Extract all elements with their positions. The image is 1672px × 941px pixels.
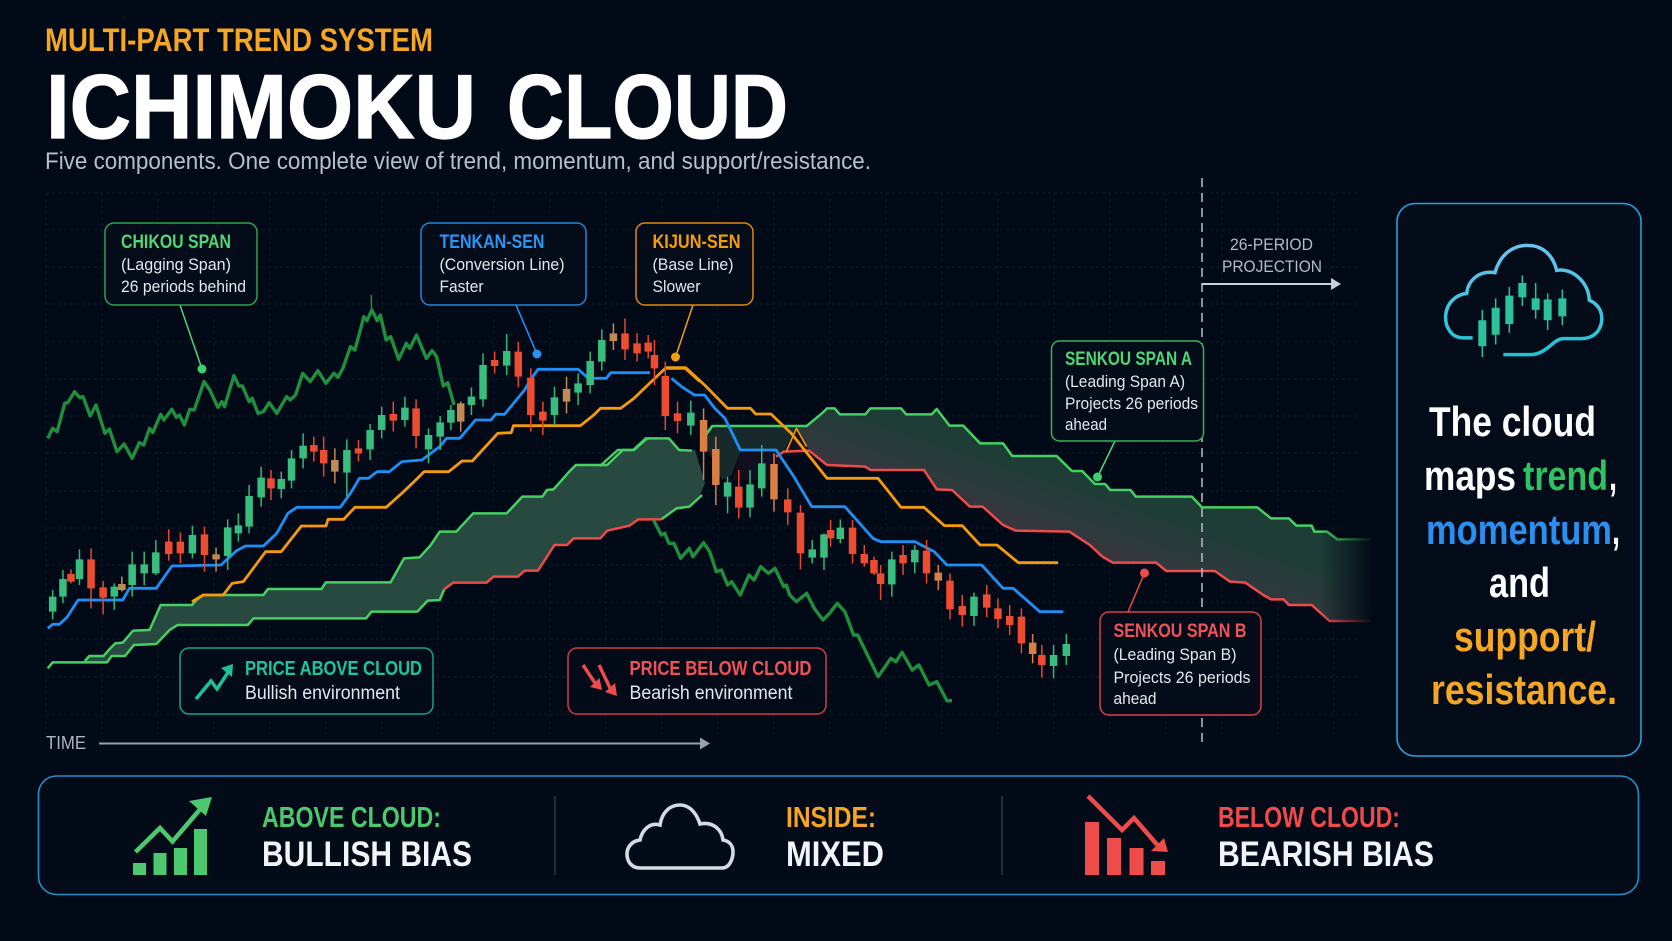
title: ICHIMOKU <box>46 57 476 158</box>
arrow: projection <box>1202 278 1341 290</box>
callout: kijun-sen: Slower <box>652 277 701 296</box>
chart: ichimoku <box>48 295 1374 701</box>
callout: tenkan-sen <box>421 223 586 358</box>
takeaway text: The cloud <box>1429 398 1596 445</box>
projection boundary dashed line <box>1201 178 1203 748</box>
callout: senkou span B: (Leading Span B) <box>1114 645 1236 664</box>
callout: tenkan-sen: (Conversion Line) <box>440 255 564 274</box>
bias: below cloud: BEARISH BIAS <box>1218 835 1434 874</box>
title: CLOUD <box>507 57 788 158</box>
callout: price above cloud: Bullish environment <box>245 683 401 704</box>
takeaway text: , <box>1612 506 1620 553</box>
callout: tenkan-sen: TENKAN-SEN <box>440 232 544 253</box>
takeaway text: momentum <box>1426 506 1612 553</box>
callout: kijun-sen: KIJUN-SEN <box>652 232 740 253</box>
takeaway text: maps <box>1424 452 1516 499</box>
green candles <box>53 329 1066 678</box>
takeaway text: , <box>1609 452 1617 499</box>
icon: bearish chart <box>1085 796 1168 875</box>
callout: chikou span: 26 periods behind <box>121 277 246 296</box>
callout: senkou span A: ahead <box>1065 415 1107 434</box>
callout: senkou span A <box>1052 341 1204 482</box>
bias: above cloud: ABOVE CLOUD: <box>262 802 441 834</box>
icon: neutral cloud <box>627 805 733 868</box>
bias: inside: MIXED <box>786 835 884 874</box>
callout: price below cloud: Bearish environment <box>630 683 793 704</box>
takeaway text: support/ <box>1454 613 1596 660</box>
senkou span A line <box>48 408 1370 668</box>
takeaway text: and <box>1489 559 1550 606</box>
callout: senkou span B: ahead <box>1114 689 1156 708</box>
callout: tenkan-sen: Faster <box>440 277 484 296</box>
bias: below cloud <box>1218 802 1434 874</box>
projection label: PROJECTION <box>1222 257 1322 276</box>
callout: senkou span A: Projects 26 periods <box>1065 394 1198 413</box>
callout: senkou span B <box>1100 568 1261 715</box>
icon: cloud with candles <box>1446 245 1602 357</box>
cloud fill: projected <box>702 408 1370 621</box>
takeaway text: trend <box>1523 452 1608 499</box>
bias: above cloud <box>262 802 472 874</box>
cloud fill: bullish <box>85 438 705 662</box>
callout: chikou span: CHIKOU SPAN <box>121 232 231 253</box>
chikou span line <box>48 295 952 701</box>
callout: price below cloud: PRICE BELOW CLOUD <box>630 658 812 680</box>
panel: bias summary <box>38 776 1638 894</box>
icon: bullish chart <box>133 797 212 875</box>
projection label <box>1202 235 1341 290</box>
tenkan-sen line <box>48 369 1063 628</box>
callout: senkou span A: (Leading Span A) <box>1065 372 1185 391</box>
panel: takeaway <box>1397 204 1641 756</box>
callout: senkou span B: Projects 26 periods <box>1114 668 1250 687</box>
kijun-sen line <box>192 368 1058 602</box>
subtitle: Five components. One complete view of trend, momentum, and support/resistance. <box>45 148 871 175</box>
takeaway text: resistance. <box>1431 666 1617 713</box>
time axis: TIME <box>46 733 86 753</box>
callout: price above cloud: PRICE ABOVE CLOUD <box>245 658 422 680</box>
callout: chikou span <box>105 223 257 374</box>
icon: down arrows <box>583 665 617 696</box>
kicker heading: MULTI-PART TREND SYSTEM <box>45 22 433 58</box>
tan candles <box>122 323 1033 663</box>
candlesticks <box>53 318 1066 678</box>
time axis <box>46 733 710 753</box>
callout: chikou span: (Lagging Span) <box>121 255 231 274</box>
callout: kijun-sen <box>636 223 753 362</box>
senkou span B line <box>444 451 1370 621</box>
bias: inside <box>786 802 884 874</box>
callout: price below cloud <box>568 648 826 714</box>
bias: inside: INSIDE: <box>786 802 876 834</box>
title <box>46 57 788 158</box>
bias: above cloud: BULLISH BIAS <box>262 835 472 874</box>
callout: price above cloud <box>180 648 433 714</box>
bias: below cloud: BELOW CLOUD: <box>1218 802 1400 834</box>
callout: kijun-sen: (Base Line) <box>652 255 734 274</box>
red candles <box>71 318 1042 678</box>
projection label: 26-PERIOD <box>1230 235 1313 254</box>
callout: senkou span A: SENKOU SPAN A <box>1065 349 1192 370</box>
right edge cloud fade <box>1320 480 1374 630</box>
icon: up arrow <box>196 664 233 699</box>
callout: senkou span B: SENKOU SPAN B <box>1114 621 1246 642</box>
takeaway text <box>1424 398 1620 713</box>
